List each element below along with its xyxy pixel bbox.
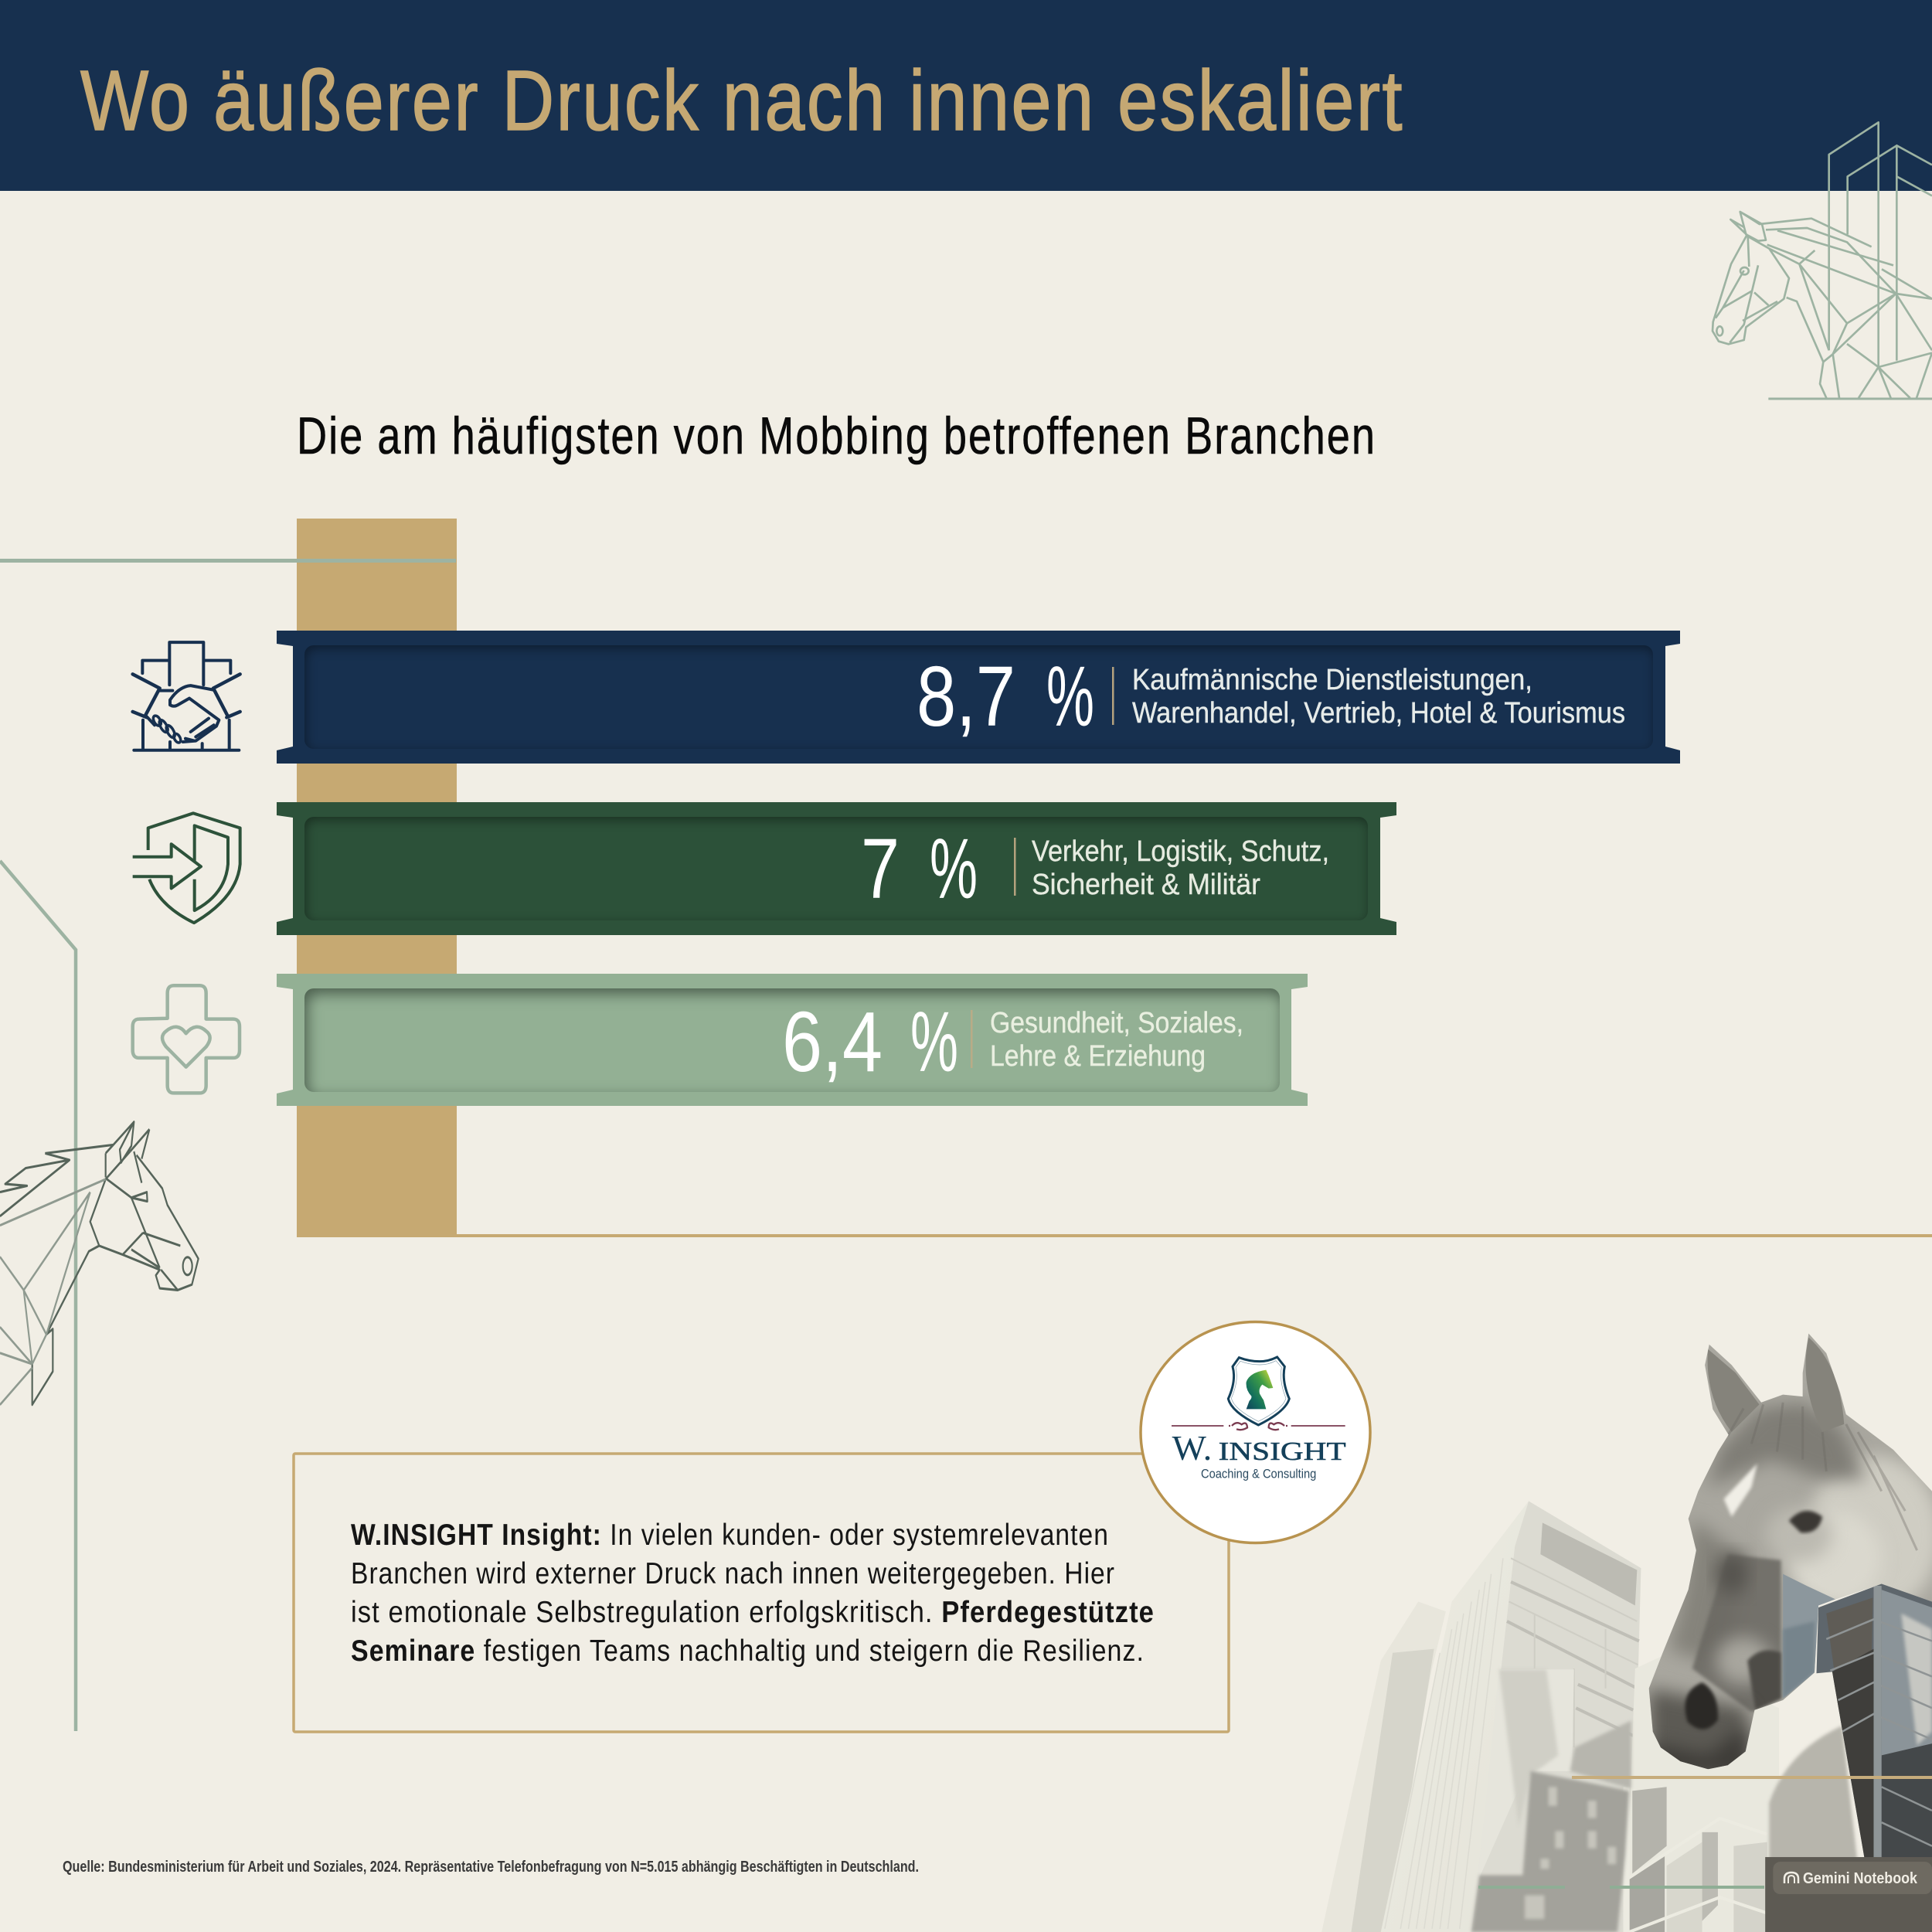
title: Wo äußerer Druck nach innen eskaliert: [80, 53, 1404, 148]
bar: 6,4 %: [277, 974, 1308, 1106]
insight box: [294, 1454, 1229, 1732]
label: Kaufmännische Dienstleistungen,: [1132, 664, 1532, 696]
value: 8,7: [917, 649, 1015, 744]
bar: 8,7 %: [277, 631, 1680, 764]
logo badge: INSIGHT: [1219, 1437, 1346, 1466]
header band: [0, 0, 1932, 191]
gemini badge: [1773, 1862, 1932, 1894]
label: [1032, 835, 1329, 901]
badge shadow strip: [1765, 1857, 1932, 1932]
source note: Quelle: Bundesministerium für Arbeit und Soziales, 2024. Repräsentative Telefonbefragung von N=5.015 abhängig Beschäftigten in Deutschland.: [63, 1859, 919, 1876]
label: [1132, 664, 1625, 730]
insight text: W.INSIGHT Insight: In vielen kunden- oder systemrelevanten: [351, 1519, 1109, 1552]
label: Lehre & Erziehung: [990, 1040, 1206, 1073]
insight text: [351, 1519, 1155, 1668]
glass tower behind: [1624, 1655, 1779, 1932]
value: 7: [861, 821, 900, 917]
chart heading: Die am häufigsten von Mobbing betroffenen Branchen: [297, 406, 1376, 465]
icon: handshake in front of building: [133, 642, 240, 750]
label: Warenhandel, Vertrieb, Hotel & Tourismus: [1132, 697, 1625, 730]
logo tagline: Coaching & Consulting: [1201, 1467, 1316, 1481]
label: [990, 1007, 1243, 1073]
decorative green line left: [0, 559, 456, 563]
logo badge: [1141, 1321, 1370, 1543]
gold axis column: [297, 519, 457, 1237]
logo rules: [1172, 1423, 1345, 1427]
logo knight: [1247, 1370, 1273, 1409]
value: [917, 649, 1094, 744]
logo ornaments: [1229, 1423, 1287, 1430]
insight text: Branchen wird externer Druck nach innen weitergegeben. Hier: [351, 1557, 1115, 1590]
icon: medical cross with heart: [133, 985, 240, 1093]
frame line left: [0, 861, 76, 1731]
line art: horse and buildings top right: [1713, 122, 1932, 399]
gold line over photo: [1572, 1776, 1932, 1779]
photo: horse and city double exposure: [1321, 1329, 1932, 1932]
icon: shield with arrow: [133, 813, 240, 923]
green line over photo: [1478, 1886, 1764, 1889]
logo shield: [1228, 1357, 1289, 1425]
value: [782, 995, 958, 1090]
gemini notebook mark: Gemini Notebook: [1803, 1870, 1918, 1887]
left tower: [1321, 1601, 1446, 1932]
value: [861, 821, 978, 917]
logo wordmark: W.: [1172, 1429, 1212, 1468]
value: %: [910, 995, 958, 1090]
value: %: [1046, 649, 1094, 744]
gold baseline: [457, 1234, 1932, 1237]
center tower: [1381, 1501, 1641, 1932]
horse body lower: [1769, 1726, 1858, 1866]
label: Verkehr, Logistik, Schutz,: [1032, 835, 1329, 868]
glass tower over horse: [1815, 1582, 1932, 1869]
insight text: Seminare festigen Teams nachhaltig und steigern die Resilienz.: [351, 1634, 1145, 1668]
value: %: [930, 821, 978, 917]
insight text: ist emotionale Selbstregulation erfolgskritisch. Pferdegestützte: [351, 1596, 1155, 1629]
bar: 7 %: [277, 802, 1396, 935]
line art: horse left: [0, 1122, 199, 1405]
value: 6,4: [782, 995, 883, 1090]
dark balcony building: [1471, 1721, 1631, 1932]
label: Gesundheit, Soziales,: [990, 1007, 1243, 1039]
label: Sicherheit & Militär: [1032, 869, 1260, 901]
horse head: [1645, 1329, 1932, 1775]
